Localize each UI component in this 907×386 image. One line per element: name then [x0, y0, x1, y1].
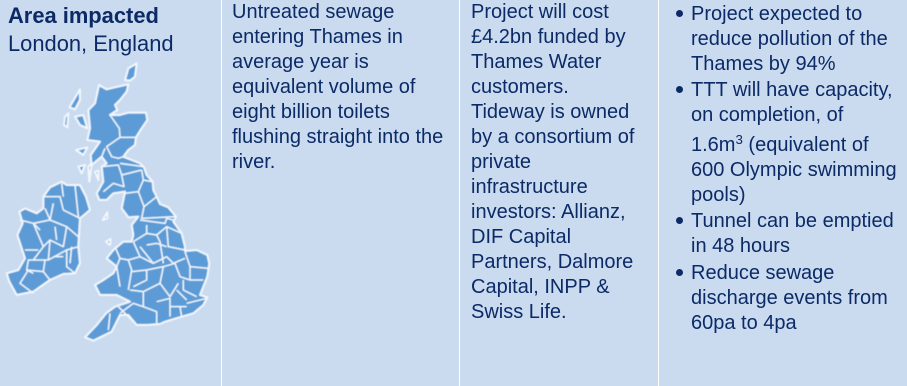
list: project benefits: in 48 hours — [691, 235, 790, 257]
text block: project cost and ownership: investors: Allianz, — [471, 201, 626, 223]
text block: project cost and ownership: by a consortium of — [471, 126, 634, 148]
text block: project cost and ownership: Project will cost — [471, 1, 609, 23]
text block: untreated sewage: river. — [232, 151, 275, 173]
list: project benefits: Thames by 94% — [691, 53, 836, 75]
panel: area impacted heading — [8, 3, 174, 56]
list: project benefits: 1.6m3 (equivalent of — [691, 132, 869, 156]
panel: area impacted heading: Area impacted — [8, 3, 159, 28]
list: project benefits: pools) — [691, 184, 745, 206]
list: project benefits: reduce pollution of the — [691, 28, 888, 50]
text block: project cost and ownership: Tideway is owned — [471, 101, 629, 123]
list: project benefits: 600 Olympic swimming — [691, 159, 897, 181]
panel: area impacted heading: London, England — [8, 31, 174, 56]
list: project benefits: 60pa to 4pa — [691, 312, 797, 334]
text block: project cost and ownership: private — [471, 151, 531, 173]
list: project benefits: discharge events from — [691, 287, 888, 309]
text block: project cost and ownership: Capital, INPP & — [471, 276, 610, 298]
text block: untreated sewage — [232, 1, 443, 173]
text block: untreated sewage: average year is — [232, 51, 369, 73]
text block: project cost and ownership: customers. — [471, 76, 569, 98]
list: project benefits: on completion, of — [691, 104, 843, 126]
text block: untreated sewage: eight billion toilets — [232, 101, 390, 123]
text block: untreated sewage: flushing straight into the — [232, 126, 443, 148]
text block: untreated sewage: equivalent volume of — [232, 76, 415, 98]
text block: project cost and ownership: infrastructure — [471, 176, 588, 198]
list: project benefits: Tunnel can be emptied — [691, 210, 894, 232]
text block: project cost and ownership: £4.2bn funded by — [471, 26, 626, 48]
list: project benefits: Reduce sewage — [691, 262, 834, 284]
text block: project cost and ownership: Partners, Dalmore — [471, 251, 633, 273]
text block: project cost and ownership: Thames Water — [471, 51, 601, 73]
text block: untreated sewage: entering Thames in — [232, 26, 403, 48]
list: project benefits: Project expected to — [691, 3, 862, 25]
text block: project cost and ownership: Swiss Life. — [471, 301, 567, 323]
list: project benefits: TTT will have capacity, — [691, 79, 893, 101]
icon: map of UK and Ireland — [6, 62, 211, 342]
text block: untreated sewage: Untreated sewage — [232, 1, 394, 23]
list: project benefits — [676, 3, 897, 334]
text block: project cost and ownership: DIF Capital — [471, 226, 571, 248]
text block: project cost and ownership — [471, 1, 634, 323]
